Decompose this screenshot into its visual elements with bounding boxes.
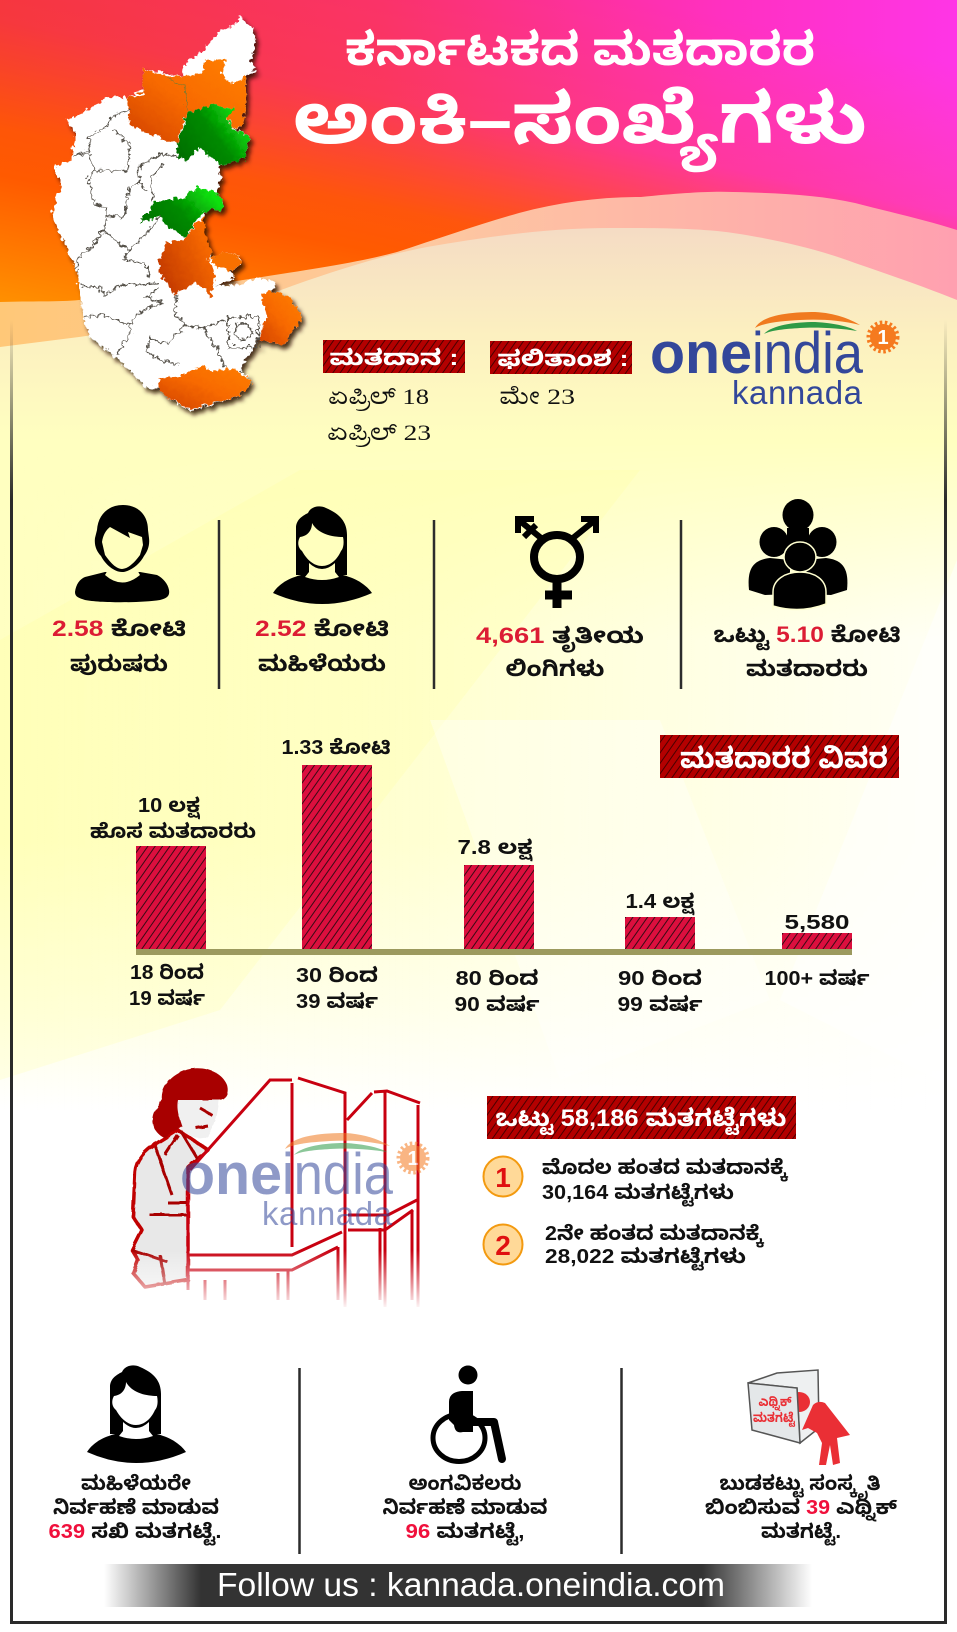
polling dates <box>323 340 465 448</box>
label: third gender: ಲಿಂಗಿಗಳು <box>506 656 604 681</box>
bar: 90 to 99 years: 1.4 ಲಕ್ಷ <box>626 891 695 916</box>
label: total voters: ಒಟ್ಟು 5.10 ಕೋಟಿ <box>714 622 901 651</box>
bar: 80 to 90 years <box>454 837 540 1016</box>
watermark logo <box>180 1133 428 1232</box>
text: disabled-run booths <box>382 1473 548 1546</box>
bar: 30 to 39 years <box>282 737 390 1013</box>
badge: results <box>490 341 632 374</box>
badge: polling <box>323 340 465 373</box>
icon: group of voters <box>749 499 847 610</box>
title: ಕರ್ನಾಟಕದ ಮತದಾರರ <box>345 23 815 75</box>
bar: 80 to 90 years: 90 ವರ್ಷ <box>454 994 540 1016</box>
orange north districts <box>125 57 244 142</box>
text: disabled-run booths: ನಿರ್ವಹಣೆ ಮಾಡುವ <box>382 1497 548 1519</box>
bar: 100 plus years: 100+ ವರ್ಷ <box>764 968 870 990</box>
item: phase 1 booths <box>484 1156 789 1207</box>
icon: ethnic polling booth: ಮತಗಟ್ಟೆ <box>753 1410 796 1427</box>
bar: 30 to 39 years: 39 ವರ್ಷ <box>296 991 378 1013</box>
label: men: 2.58 ಕೋಟಿ <box>52 616 186 641</box>
dates: polling <box>327 384 431 448</box>
bar: 80 to 90 years: 7.8 ಲಕ್ಷ <box>458 837 533 862</box>
icon: ethnic polling booth: ಎಥ್ನಿಕ್ <box>758 1394 792 1411</box>
icon: woman <box>273 506 372 604</box>
orange district east <box>256 289 300 342</box>
small orange district <box>208 251 240 269</box>
label: total voters: ಮತದಾರರು <box>746 656 868 681</box>
title: ಅಂಕಿ–ಸಂಖ್ಯೆಗಳು <box>293 80 867 173</box>
text: ethnic booths: ಬಿಂಬಿಸುವ 39 ಎಥ್ನಿಕ್ <box>705 1497 898 1522</box>
badge: polling: ಮತದಾನ : <box>330 345 458 370</box>
logo: oneindia kannada <box>650 312 898 411</box>
item: phase 2 booths: 2 <box>495 1230 511 1261</box>
badge: total polling booths <box>487 1096 796 1139</box>
results date <box>490 341 632 409</box>
label: third gender: 4,661 ತೃತೀಯ <box>476 623 644 652</box>
badge: voter details: ಮತದಾರರ ವಿವರ <box>680 743 888 775</box>
item: phase 1 booths: 30,164 ಮತಗಟ್ಟೆಗಳು <box>542 1182 734 1207</box>
item: phase 1 booths: ಮೊದಲ ಹಂತದ ಮತದಾನಕ್ಕೆ <box>542 1157 789 1182</box>
badge: voter details <box>660 735 899 778</box>
orange district south <box>156 362 251 407</box>
label: women: ಮಹಿಳೆಯರು <box>258 651 386 676</box>
icon: man <box>75 505 169 602</box>
person <box>132 1068 228 1287</box>
dividers <box>300 1368 622 1554</box>
text: ethnic booths <box>705 1473 898 1546</box>
booth lines <box>188 1078 420 1307</box>
label: third gender <box>476 623 644 681</box>
footer band <box>104 1564 812 1607</box>
fade <box>120 1250 430 1310</box>
bar: 90 to 99 years <box>618 891 703 1016</box>
label: women: 2.52 ಕೋಟಿ <box>255 616 389 641</box>
footer band: Follow us : kannada.oneindia.com <box>217 1566 725 1603</box>
text: women-run booths: 639 ಸಖಿ ಮತಗಟ್ಟೆ. <box>48 1521 222 1546</box>
district boundaries <box>71 107 256 367</box>
title <box>293 23 867 173</box>
icon: woman-run booth <box>87 1365 186 1463</box>
text: ethnic booths: ಬುಡಕಟ್ಟು ಸಂಸ್ಕೃತಿ <box>720 1473 880 1501</box>
bar: 90 to 99 years: 90 ರಿಂದ <box>618 968 702 990</box>
dates: polling: ಏಪ್ರಿಲ್ 23 <box>327 420 431 448</box>
bar: 18 to 19 years: 10 ಲಕ್ಷ <box>138 795 200 820</box>
orange district central <box>156 214 213 297</box>
text: women-run booths <box>48 1473 222 1546</box>
icon: third gender symbol <box>518 519 596 608</box>
bar: 100 plus years: 5,580 <box>784 912 850 934</box>
dividers <box>219 520 681 689</box>
text: disabled-run booths: ಅಂಗವಿಕಲರು <box>408 1473 522 1495</box>
label: men <box>52 616 186 676</box>
page background <box>0 0 957 1110</box>
badge: total polling booths: ಒಟ್ಟು 58,186 ಮತಗಟ್ಟೆಗಳು <box>496 1105 786 1136</box>
bar: 90 to 99 years: 99 ವರ್ಷ <box>618 994 703 1016</box>
bar: 80 to 90 years: 80 ರಿಂದ <box>456 968 538 990</box>
item: phase 2 booths <box>484 1223 765 1271</box>
text: ethnic booths: ಮತಗಟ್ಟೆ. <box>761 1521 841 1546</box>
bar: 18 to 19 years <box>90 795 256 1010</box>
text: disabled-run booths: 96 ಮತಗಟ್ಟೆ, <box>406 1521 524 1546</box>
state outline <box>50 14 300 409</box>
map of Karnataka <box>50 14 300 409</box>
text: women-run booths: ಮಹಿಳೆಯರೇ <box>81 1473 191 1495</box>
bar: 18 to 19 years: 19 ವರ್ಷ <box>129 988 205 1010</box>
icon: ethnic polling booth <box>748 1370 850 1465</box>
bar: 30 to 39 years: 1.33 ಕೋಟಿ <box>282 737 390 759</box>
bar: 18 to 19 years: ಹೊಸ ಮತದಾರರು <box>90 821 256 843</box>
bar: 18 to 19 years: 18 ರಿಂದ <box>130 962 204 984</box>
bar: 100 plus years <box>764 912 870 990</box>
text: women-run booths: ನಿರ್ವಹಣೆ ಮಾಡುವ <box>53 1497 219 1519</box>
label: women <box>255 616 389 676</box>
date: results: ಮೇ 23 <box>499 384 575 409</box>
illustration: voter at polling booth <box>120 1068 430 1310</box>
green district central <box>138 186 222 236</box>
item: phase 1 booths: 1 <box>495 1162 511 1193</box>
item: phase 2 booths: 2ನೇ ಹಂತದ ಮತದಾನಕ್ಕೆ <box>545 1223 765 1248</box>
label: total voters <box>714 622 901 681</box>
dates: polling: ಏಪ್ರಿಲ್ 18 <box>328 384 429 412</box>
axis <box>136 949 852 955</box>
bar: 30 to 39 years: 30 ರಿಂದ <box>296 965 378 987</box>
label: men: ಪುರುಷರು <box>70 651 168 676</box>
green district north <box>175 102 248 162</box>
icon: wheelchair <box>433 1366 502 1462</box>
badge: results: ಫಲಿತಾಂಶ : <box>498 346 628 371</box>
page border <box>10 320 947 1622</box>
item: phase 2 booths: 28,022 ಮತಗಟ್ಟೆಗಳು <box>545 1246 746 1271</box>
bar chart: voters by age <box>90 737 870 1016</box>
